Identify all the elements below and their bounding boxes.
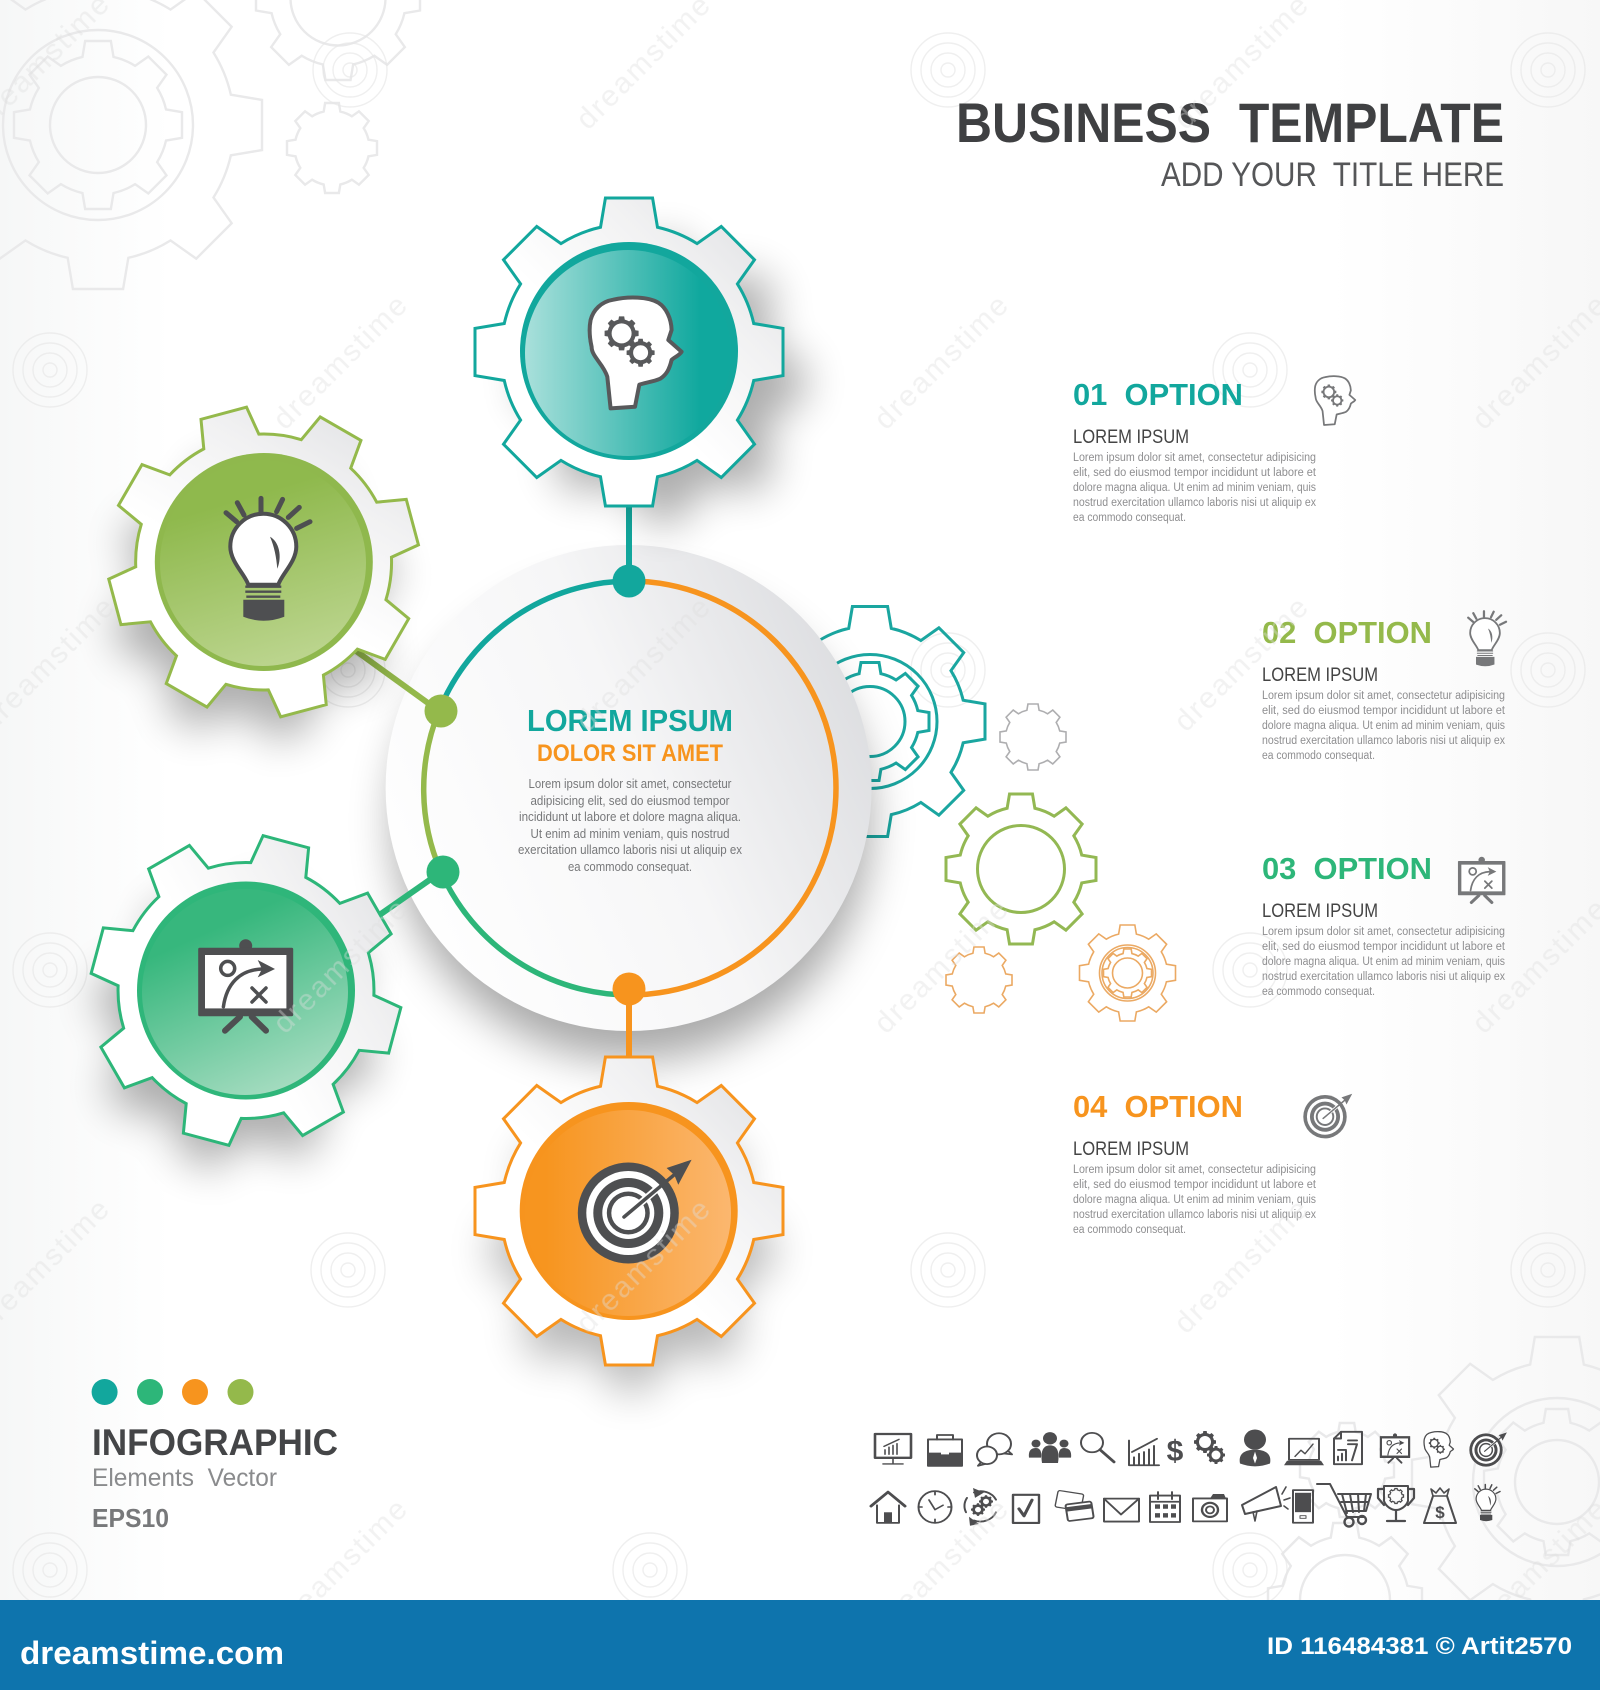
icon: calendar bbox=[1150, 1492, 1180, 1522]
panel: option 03: Lorem ipsum dolor sit amet, consectetur adipisicing bbox=[1262, 926, 1505, 938]
panel: option 04 bbox=[1073, 1089, 1352, 1236]
watermark text: dreamstime bbox=[868, 289, 1015, 436]
infographic label: EPS10 bbox=[92, 1503, 169, 1533]
title: BUSINESS TEMPLATE bbox=[956, 91, 1504, 154]
background gears: bottom right bbox=[1268, 1337, 1600, 1677]
panel: option 04: dolore magna aliqua. Ut enim ad minim veniam, quis bbox=[1073, 1194, 1316, 1206]
panel: option 02: 02 OPTION bbox=[1262, 615, 1432, 650]
center text block: LOREM IPSUM bbox=[527, 703, 733, 738]
panel: option 03: ea commodo consequat. bbox=[1262, 986, 1375, 998]
panel: option 04: 04 OPTION bbox=[1073, 1089, 1243, 1124]
gear outline: orange double bbox=[1080, 925, 1176, 1021]
infographic label: Elements Vector bbox=[92, 1464, 277, 1492]
panel: option 04: nostrud exercitation ullamco laboris nisi ut aliquip ex bbox=[1073, 1209, 1316, 1221]
watermark text: dreamstime bbox=[1168, 591, 1315, 738]
center text block: Ut enim ad minim veniam, quis nostrud bbox=[530, 827, 730, 841]
gear: orange option 4 bbox=[475, 1057, 783, 1390]
gear: lime option 2 bbox=[75, 373, 452, 771]
watermark text: dreamstime bbox=[267, 1493, 414, 1640]
icon: strategy board small bbox=[1380, 1433, 1410, 1463]
title: ADD YOUR TITLE HERE bbox=[1161, 156, 1504, 194]
icon: monitor chart bbox=[875, 1434, 911, 1464]
watermark text: dreamstime bbox=[267, 893, 414, 1040]
infographic label bbox=[92, 1422, 338, 1533]
icon: clock bbox=[918, 1491, 952, 1523]
icon: money bag bbox=[1424, 1488, 1456, 1523]
icon: megaphone bbox=[1242, 1487, 1290, 1521]
icon set row 1 bbox=[875, 1430, 1507, 1468]
panel: option 04: elit, sed do eiusmod tempor incididunt ut labore et bbox=[1073, 1179, 1317, 1191]
gear outline: teal double gear bbox=[755, 606, 985, 836]
panel: option 01: ea commodo consequat. bbox=[1073, 512, 1186, 524]
icon: envelope bbox=[1104, 1499, 1139, 1522]
panel: option 03 bbox=[1262, 851, 1506, 998]
panel: option 01: nostrud exercitation ullamco laboris nisi ut aliquip ex bbox=[1073, 497, 1316, 509]
icon: checkbox bbox=[1013, 1495, 1039, 1523]
watermark text: dreamstime bbox=[570, 591, 717, 738]
panel: option 02: dolore magna aliqua. Ut enim ad minim veniam, quis bbox=[1262, 720, 1505, 732]
watermark text: dreamstime bbox=[868, 893, 1015, 1040]
bottom banner bbox=[0, 1600, 1600, 1690]
icon: target small bbox=[1469, 1432, 1507, 1467]
progress ring bbox=[424, 581, 836, 995]
gear outline: grey small bbox=[1000, 704, 1066, 770]
gear: green option 3 bbox=[57, 802, 435, 1199]
icon: bulb bbox=[1468, 611, 1506, 666]
panel: option 02: Lorem ipsum dolor sit amet, consectetur adipisicing bbox=[1262, 690, 1505, 702]
panel: option 01 bbox=[1073, 376, 1355, 524]
icon: refresh gears bbox=[964, 1488, 996, 1526]
ring nodes bbox=[424, 564, 646, 1006]
icon: strategy board bbox=[198, 939, 293, 1031]
watermark text: dreamstime bbox=[267, 289, 414, 436]
panel: option 01: Lorem ipsum dolor sit amet, consectetur adipisicing bbox=[1073, 452, 1316, 464]
panel: option 01: elit, sed do eiusmod tempor incididunt ut labore et bbox=[1073, 467, 1317, 479]
panel: option 03: LOREM IPSUM bbox=[1262, 901, 1378, 922]
panel: option 03: dolore magna aliqua. Ut enim ad minim veniam, quis bbox=[1262, 956, 1505, 968]
central disc bbox=[386, 545, 872, 1031]
icon: shopping cart bbox=[1317, 1484, 1371, 1526]
panel: option 02: nostrud exercitation ullamco laboris nisi ut aliquip ex bbox=[1262, 735, 1505, 747]
icon: laptop bbox=[1284, 1439, 1324, 1465]
panel: option 04: ea commodo consequat. bbox=[1073, 1224, 1186, 1236]
icon: house bbox=[871, 1492, 905, 1523]
icon: light bulb small bbox=[1475, 1485, 1500, 1521]
panel: option 04: LOREM IPSUM bbox=[1073, 1139, 1189, 1160]
icon: growth chart bbox=[1129, 1439, 1159, 1465]
icon: phone bbox=[1293, 1490, 1313, 1523]
gear outline: lime bbox=[946, 794, 1096, 944]
title bbox=[956, 91, 1504, 194]
icon: credit cards bbox=[1055, 1490, 1094, 1521]
panel: option 03: 03 OPTION bbox=[1262, 851, 1432, 886]
center text block: ea commodo consequat. bbox=[568, 860, 692, 874]
gear outline: orange small bbox=[946, 947, 1012, 1013]
panel: option 02: elit, sed do eiusmod tempor incididunt ut labore et bbox=[1262, 705, 1506, 717]
icon: board bbox=[1458, 857, 1505, 902]
bottom banner: dreamstime.com bbox=[20, 1635, 284, 1671]
icon: briefcase bbox=[928, 1435, 962, 1466]
background gears: top left bbox=[0, 0, 420, 289]
bottom banner: ID 116484381 © Artit2570 bbox=[1267, 1633, 1572, 1660]
legend dots bbox=[92, 1379, 253, 1405]
icon: target bbox=[1303, 1094, 1352, 1138]
icon: trophy bbox=[1378, 1486, 1414, 1521]
icon: document bbox=[1334, 1432, 1362, 1464]
icon: dollar sign: $ bbox=[1167, 1435, 1184, 1468]
center text block: Lorem ipsum dolor sit amet, consectetur bbox=[528, 777, 732, 791]
icon: people group bbox=[1029, 1432, 1071, 1463]
central disc shadow bbox=[394, 584, 870, 1060]
connectors bbox=[352, 505, 629, 1062]
center text block: incididunt ut labore et dolore magna aliqua. bbox=[519, 810, 741, 824]
icon: target bbox=[578, 1160, 692, 1264]
panel: option 04: Lorem ipsum dolor sit amet, consectetur adipisicing bbox=[1073, 1164, 1316, 1176]
icon: head small bbox=[1424, 1432, 1453, 1467]
icon: camera bbox=[1193, 1494, 1227, 1521]
panel: option 01: LOREM IPSUM bbox=[1073, 427, 1189, 448]
icon: money bag: $ bbox=[1435, 1503, 1445, 1522]
gear: teal option 1 bbox=[475, 198, 804, 522]
watermark text: dreamstime bbox=[570, 1193, 717, 1340]
watermark text: dreamstime bbox=[1168, 1193, 1315, 1340]
panel: option 02: ea commodo consequat. bbox=[1262, 750, 1375, 762]
panel: option 03: elit, sed do eiusmod tempor incididunt ut labore et bbox=[1262, 941, 1506, 953]
icon: business person bbox=[1240, 1430, 1270, 1466]
icon: head bbox=[1315, 376, 1355, 425]
panel: option 03: nostrud exercitation ullamco laboris nisi ut aliquip ex bbox=[1262, 971, 1505, 983]
center text block: exercitation ullamco laboris nisi ut aliquip ex bbox=[518, 843, 743, 857]
center text block bbox=[518, 703, 743, 874]
icon: light bulb bbox=[226, 498, 310, 621]
icon: head with gears bbox=[590, 298, 682, 408]
panel: option 01: 01 OPTION bbox=[1073, 377, 1243, 412]
icon set row 2 bbox=[871, 1484, 1500, 1526]
center text block: adipisicing elit, sed do eiusmod tempor bbox=[530, 794, 730, 808]
center text block: DOLOR SIT AMET bbox=[537, 740, 723, 767]
infographic label: INFOGRAPHIC bbox=[92, 1422, 338, 1463]
outline gears cluster bbox=[755, 606, 1176, 1021]
panel: option 02: LOREM IPSUM bbox=[1262, 665, 1378, 686]
panel: option 01: dolore magna aliqua. Ut enim ad minim veniam, quis bbox=[1073, 482, 1316, 494]
watermark text: dreamstime bbox=[868, 1493, 1015, 1640]
icon: chat bubbles bbox=[977, 1433, 1012, 1466]
panel: option 02 bbox=[1262, 611, 1506, 762]
icon: gears bbox=[1194, 1431, 1225, 1464]
icon: magnifier bbox=[1081, 1433, 1114, 1462]
